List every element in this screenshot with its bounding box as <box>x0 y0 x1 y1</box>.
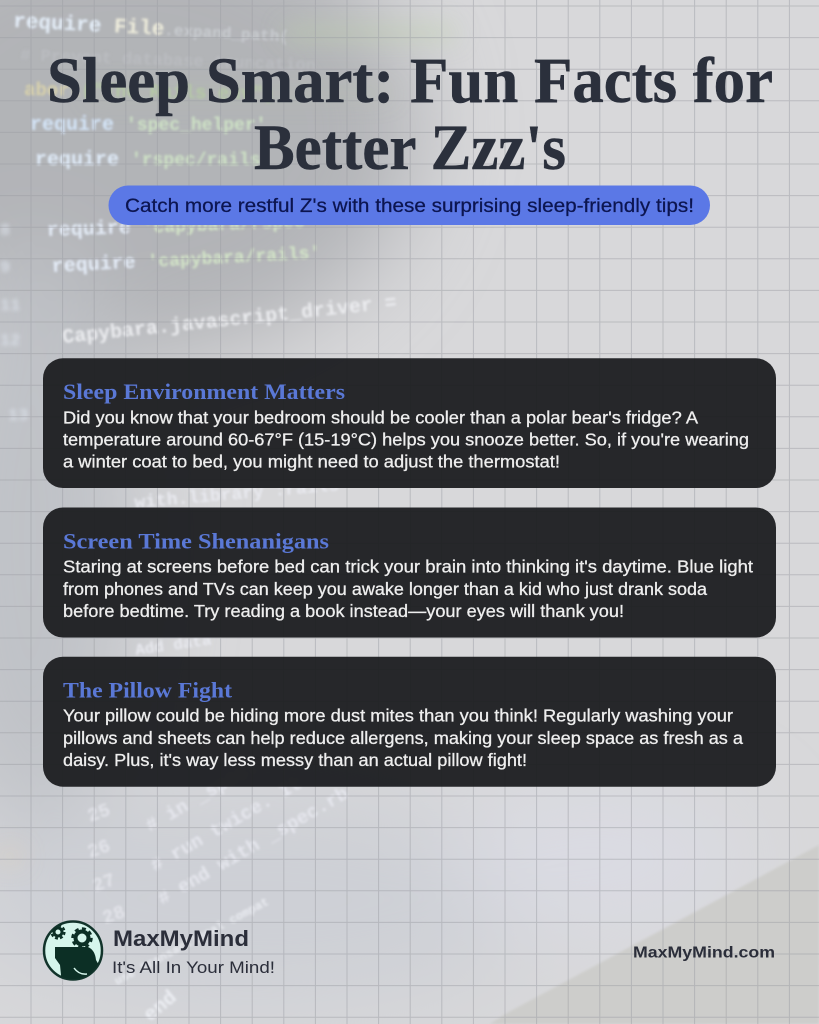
background: blurred code screenshot: 13 <box>8 407 28 426</box>
background: blurred code screenshot: abort("The Rails env") <box>24 79 275 105</box>
background: blurred code screenshot: require 'rspec/rails' <box>35 149 271 172</box>
panel: screen time shenanigans <box>43 508 776 638</box>
background: blurred code screenshot: require 'spec_helper' <box>30 114 266 137</box>
text block: pillows and sheets can help reduce allergens, making your sleep space as fresh as a <box>63 728 743 748</box>
text block: Did you know that your bedroom should be cooler than a polar bear's fridge? A <box>63 408 698 428</box>
website: MaxMyMind.com <box>633 944 775 962</box>
background: blurred code screenshot: require File.expand_path( <box>13 11 290 48</box>
text block: daisy. Plus, it's way less messy than an actual pillow fight! <box>63 750 527 770</box>
text block: Staring at screens before bed can trick your brain into thinking it's daytime. Blue light <box>63 557 753 577</box>
text block <box>63 408 749 472</box>
background: blurred code screenshot: Add data <box>134 631 213 660</box>
icon: brain logo <box>44 922 102 985</box>
background: blurred code screenshot: 25 <box>85 799 113 828</box>
background: blurred code screenshot: require 'capybara/rspec' <box>46 211 316 243</box>
heading: Screen Time Shenanigans <box>63 528 329 553</box>
background: blurred code screenshot: 12 <box>0 332 20 351</box>
panel: sleep environment matters <box>43 358 776 488</box>
heading: The Pillow Fight <box>63 678 233 703</box>
tagline: It's All In Your Mind! <box>112 958 275 977</box>
background: blurred code screenshot: require 'capybara/rails' <box>51 242 321 279</box>
text block: before bedtime. Try reading a book instead—your eyes will thank you! <box>63 601 624 621</box>
background: blurred code screenshot: 11 <box>0 297 20 316</box>
text block: temperature around 60-67°F (15-19°C) helps you snooze better. So, if you're wearing <box>63 430 749 450</box>
background: blurred code screenshot: # in _spec.rb <box>142 744 281 837</box>
title <box>47 45 773 184</box>
background: blurred code screenshot: # run twice. It <box>147 773 306 877</box>
background: blurred code screenshot: 9 <box>0 259 10 278</box>
text block <box>63 557 753 621</box>
title: Better Zzz's <box>254 112 566 184</box>
background: blurred code screenshot: 28 <box>100 901 128 930</box>
background: blurred code screenshot: 26 <box>85 835 113 864</box>
text block: Your pillow could be hiding more dust mites than you think! Regularly washing your <box>63 706 733 726</box>
background: blurred code screenshot: 27 <box>90 869 118 898</box>
background: blurred code screenshot: Capybara.javascript_driver = <box>61 292 398 350</box>
subtitle pill: Catch more restful Z's with these surprising sleep-friendly tips! <box>125 196 694 217</box>
title: Sleep Smart: Fun Facts for <box>47 45 773 117</box>
background: blurred code screenshot: with.library :rails <box>134 476 340 514</box>
background: blurred code screenshot: # Prevent database truncation <box>20 47 316 76</box>
background: blurred code screenshot: use transactional compat <box>112 895 271 989</box>
heading: Sleep Environment Matters <box>63 379 345 404</box>
background: blurred code screenshot: 8 <box>0 222 10 241</box>
background: blurred code screenshot: # end with _spec.rb <box>154 783 353 910</box>
subtitle pill <box>108 186 710 225</box>
text block: a winter coat to bed, you might need to adjust the thermostat! <box>63 452 560 472</box>
brand name: MaxMyMind <box>113 926 249 951</box>
panel: the pillow fight <box>43 657 776 787</box>
text block: from phones and TVs can keep you awake longer than a kid who just drank soda <box>63 579 707 599</box>
text block <box>63 706 743 770</box>
